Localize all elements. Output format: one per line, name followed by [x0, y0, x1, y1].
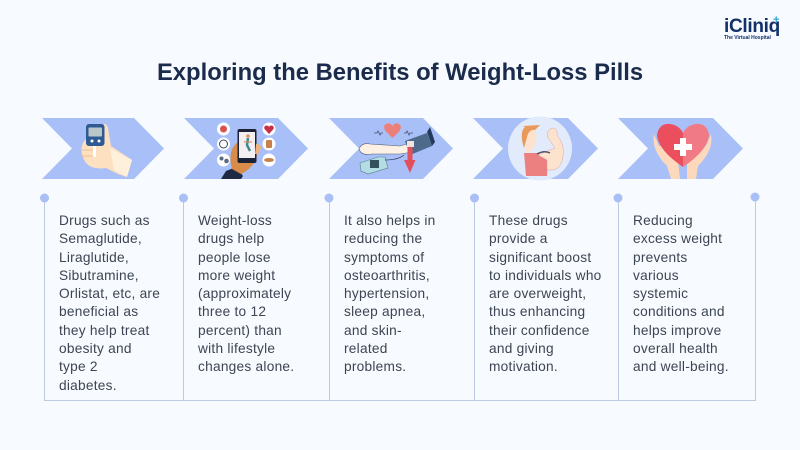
text: column 4: significant boost	[489, 250, 591, 265]
timeline frame	[44, 197, 756, 401]
text: column 1: Orlistat, etc, are	[59, 286, 160, 301]
text: column 3: hypertension,	[344, 286, 429, 301]
text: column 5	[633, 213, 729, 374]
text: column 4: to individuals who	[489, 268, 602, 283]
text: column 5: conditions and	[633, 304, 725, 319]
text: column 3	[344, 213, 436, 374]
text: column 2: percent) than	[198, 323, 282, 338]
text: column 1: diabetes.	[59, 378, 117, 393]
icon: phone with health apps	[217, 122, 276, 179]
text: column 3: symptoms of	[344, 250, 424, 265]
text: column 4	[489, 213, 602, 374]
text: column 2: (approximately	[198, 286, 291, 301]
icon: hand holding glucose meter	[82, 124, 132, 177]
text: column 1: Sibutramine,	[59, 268, 139, 283]
text: column 5: systemic	[633, 286, 688, 301]
text: column 1	[59, 213, 160, 393]
text: column 4: their confidence	[489, 323, 590, 338]
text: column 3: reducing the	[344, 231, 422, 246]
text: column 1: type 2	[59, 359, 98, 374]
text: column 4: thus enhancing	[489, 304, 585, 319]
icon: hands holding heart	[654, 124, 711, 179]
icon: blood pressure cuff	[359, 123, 435, 174]
text: column 2: more weight	[198, 268, 275, 283]
text: column 5: helps improve	[633, 323, 721, 338]
text: column 2: Weight-loss	[198, 213, 272, 228]
text: column 2: three to 12	[198, 304, 266, 319]
text: column 3: sleep apnea,	[344, 304, 425, 319]
chevron 2	[184, 118, 308, 179]
text: column 4: are overweight,	[489, 286, 586, 301]
text: column 1: Drugs such as	[59, 213, 150, 228]
text: column 5: overall health	[633, 341, 718, 356]
title: Exploring the Benefits of Weight-Loss Pills	[157, 59, 643, 86]
logo: iCliniq: iCliniq	[724, 16, 780, 37]
text: column 1: Liraglutide,	[59, 250, 129, 265]
text: column 2: people lose	[198, 250, 271, 265]
text: column 2	[198, 213, 294, 374]
chevron 3	[329, 118, 453, 179]
text: column 4: These drugs	[489, 213, 568, 228]
chevron 5	[618, 118, 743, 179]
text: column 3: problems.	[344, 359, 406, 374]
text: column 1: beneficial as	[59, 304, 138, 319]
chevron 4	[473, 118, 598, 179]
text: column 5: Reducing	[633, 213, 693, 228]
text: column 1: Semaglutide,	[59, 231, 142, 246]
text: column 3: and skin-	[344, 323, 402, 338]
text: column 1: obesity and	[59, 341, 132, 356]
text: column 5: excess weight	[633, 231, 722, 246]
timeline dots	[40, 192, 760, 202]
text: column 1: they help treat	[59, 323, 150, 338]
text: column 4: provide a	[489, 231, 548, 246]
icon: confident woman flexing	[508, 116, 572, 180]
text: column 5: prevents	[633, 250, 688, 265]
text: column 3: osteoarthritis,	[344, 268, 430, 283]
text: column 3: related	[344, 341, 388, 356]
text: column 5: various	[633, 268, 679, 283]
text: column 2: with lifestyle	[198, 341, 275, 356]
chevron 1	[42, 118, 164, 179]
text: column 2: changes alone.	[198, 359, 294, 374]
logo: iCliniq: +	[773, 14, 779, 26]
text: column 3: It also helps in	[344, 213, 436, 228]
text: column 5: and well-being.	[633, 359, 729, 374]
text: column 4: motivation.	[489, 359, 558, 374]
text: column 2: drugs help	[198, 231, 264, 246]
text: column 4: and giving	[489, 341, 554, 356]
logo: iCliniq: The Virtual Hospital	[724, 35, 771, 41]
